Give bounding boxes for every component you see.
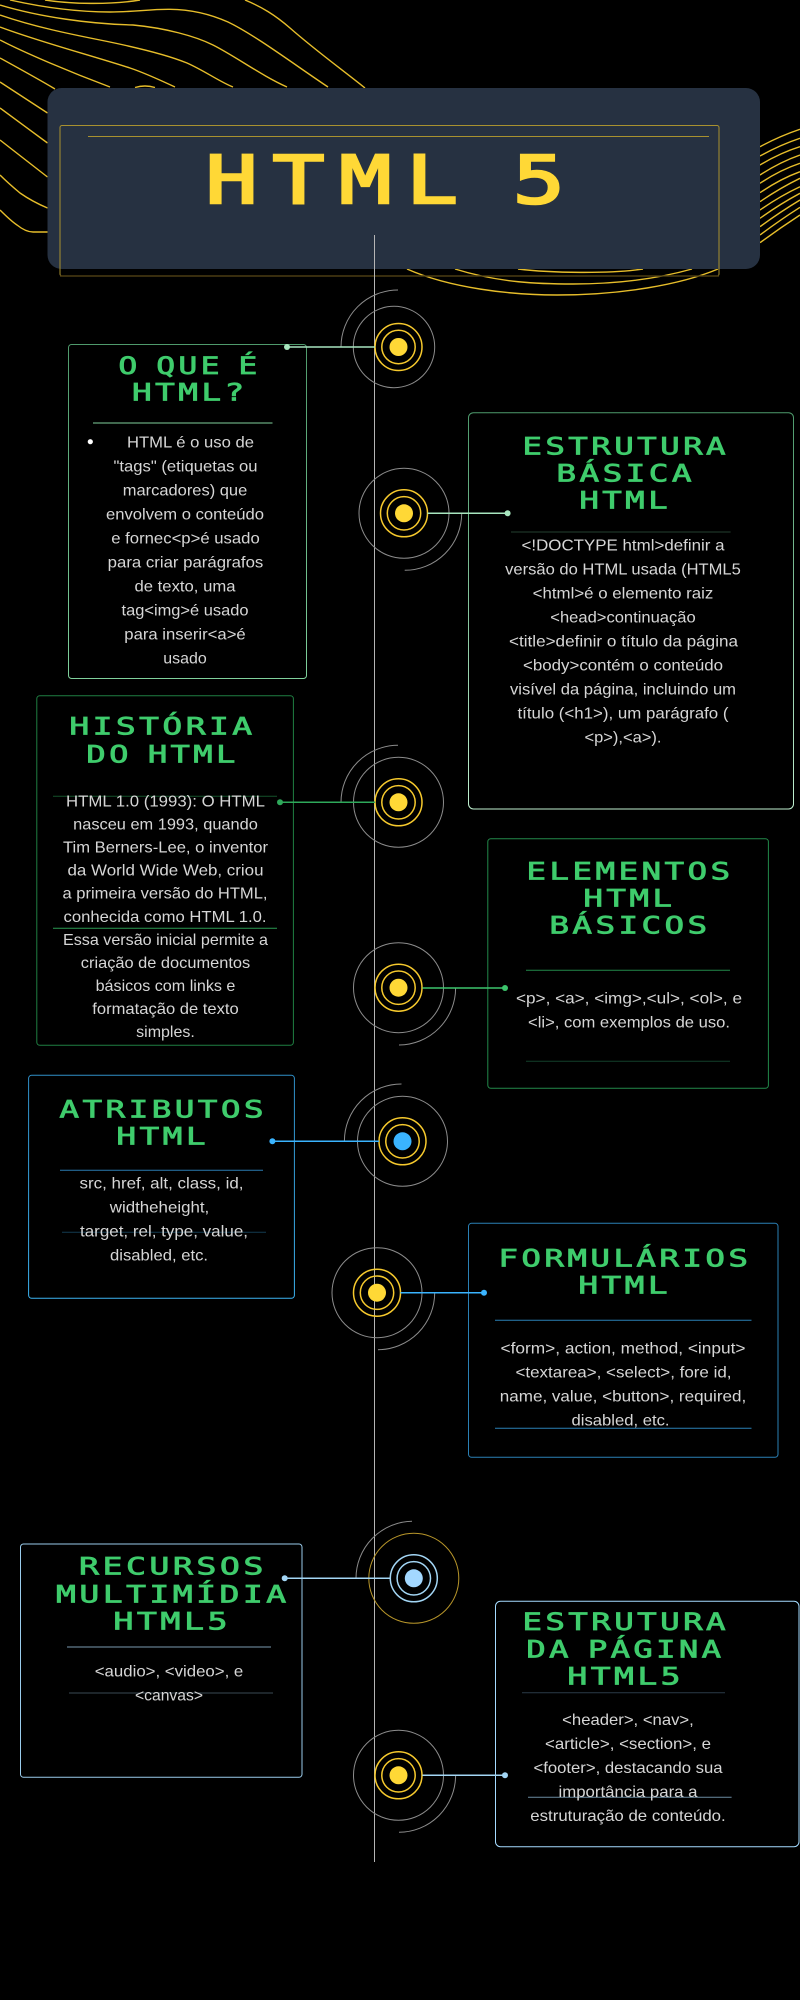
heading: o que é html: HTML? (132, 379, 248, 407)
body text: Tim Berners-Lee, o inventor (63, 840, 269, 857)
body text: disabled, etc. (110, 1247, 208, 1264)
body text: usado (163, 650, 207, 667)
heading: história do html: HISTÓRIA (69, 710, 256, 740)
body text: <li>, com exemplos de uso. (528, 1014, 730, 1031)
body text: Essa versão inicial permite a (63, 932, 268, 949)
heading: elementos html básicos: HTML (583, 884, 675, 912)
body text: HTML 1.0 (1993): O HTML (66, 794, 265, 810)
body text: src, href, alt, class, id, (80, 1175, 244, 1192)
body text: de texto, uma (134, 578, 236, 595)
body text: visível da página, incluindo um (510, 682, 736, 698)
heading: estrutura básica html: BÁSICA (556, 458, 695, 487)
body text (516, 990, 742, 1031)
heading: história do html (69, 710, 256, 768)
body text (80, 1175, 248, 1264)
body text: estruturação de conteúdo. (530, 1808, 726, 1825)
heading: formulários html (498, 1244, 751, 1300)
heading: estrutura da página html5: ESTRUTURA (522, 1608, 729, 1636)
body text: marcadores) que (123, 482, 247, 499)
body text: <form>, action, method, <input> (500, 1340, 746, 1357)
heading: elementos html básicos (526, 857, 734, 939)
timeline axis (374, 235, 376, 1862)
body text: <textarea>, <select>, fore id, (516, 1364, 732, 1381)
body text: simples. (136, 1024, 195, 1041)
connector 1 (284, 344, 375, 350)
heading: formulários html: HTML (578, 1272, 671, 1300)
heading: recursos multimídia html5: MULTIMÍDIA (56, 1579, 290, 1608)
body text: <p>, <a>, <img>,<ul>, <ol>, e (516, 990, 742, 1007)
body text: <audio>, <video>, e (95, 1664, 243, 1681)
body text: <title>definir o título da página (509, 634, 738, 650)
heading: atributos html: ATRIBUTOS (59, 1095, 267, 1123)
panel: estrutura da página html5 (496, 1601, 799, 1847)
panel: elementos html básicos (488, 839, 768, 1088)
heading: o que é html: O QUE É (118, 351, 261, 380)
heading: estrutura básica html: HTML (579, 487, 671, 515)
body text: importância para a (558, 1784, 698, 1801)
heading: estrutura básica html: ESTRUTURA (522, 433, 729, 461)
body text (500, 1340, 746, 1429)
body text (95, 1664, 243, 1705)
heading: recursos multimídia html5 (56, 1552, 290, 1635)
heading: estrutura da página html5: DA PÁGINA (526, 1634, 724, 1663)
body text: <footer>, destacando sua (534, 1760, 723, 1777)
heading: atributos html (59, 1095, 267, 1151)
body text: versão do HTML usada (HTML5 (505, 562, 741, 578)
body text (106, 434, 264, 667)
connector 8 (422, 1772, 508, 1778)
body text: para criar parágrafos (108, 554, 263, 571)
panel: história do html (37, 696, 293, 1045)
panel: formulários html (468, 1223, 778, 1457)
body text: para inserir<a>é (124, 626, 246, 643)
connector 6 (400, 1290, 487, 1296)
body text: target, rel, type, value, (80, 1223, 248, 1240)
body text: básicos com links e (96, 978, 236, 995)
body text: <body>contém o conteúdo (523, 658, 723, 674)
body text: <html>é o elemento raiz (533, 586, 713, 602)
heading: elementos html básicos: ELEMENTOS (526, 857, 734, 885)
body text: formatação de texto (92, 1001, 239, 1018)
background contour lines (0, 0, 800, 295)
body text: <header>, <nav>, (562, 1712, 694, 1729)
title: HTML 5 (206, 142, 580, 219)
body text: disabled, etc. (572, 1412, 670, 1429)
body text: name, value, <button>, required, (500, 1388, 746, 1405)
body text (530, 1712, 726, 1825)
body text: <canvas> (135, 1688, 203, 1705)
body text (505, 538, 741, 746)
heading: recursos multimídia html5: RECURSOS (79, 1552, 267, 1580)
body text: conhecida como HTML 1.0. (64, 909, 266, 926)
body text: nasceu em 1993, quando (73, 817, 258, 834)
title banner (48, 88, 760, 276)
heading: o que é html (118, 351, 261, 407)
heading: história do html: DO HTML (86, 740, 239, 768)
body text: e fornec<p>é usado (111, 530, 260, 547)
body text: envolvem o conteúdo (106, 506, 264, 523)
body text: <!DOCTYPE html>definir a (522, 538, 725, 554)
heading: estrutura básica html (522, 433, 729, 515)
panel: o que é html (68, 344, 306, 678)
heading: elementos html básicos: BÁSICOS (549, 910, 711, 939)
node 5 (344, 1084, 448, 1186)
bullet (88, 439, 93, 444)
body text: a primeira versão do HTML, (62, 886, 268, 903)
connector 7 (282, 1575, 390, 1581)
node 7 (356, 1521, 459, 1623)
node 8 (354, 1730, 456, 1832)
node 4 (354, 943, 456, 1045)
node 1 (341, 290, 435, 388)
panel: recursos multimídia html5 (20, 1544, 302, 1777)
node 6 (332, 1248, 435, 1350)
body text: widtheheight, (109, 1199, 209, 1216)
body text: <article>, <section>, e (545, 1736, 711, 1753)
connector 5 (269, 1138, 379, 1144)
body text: <head>continuação (550, 610, 696, 626)
node 2 (359, 468, 462, 570)
connector 4 (422, 985, 508, 991)
body text: "tags" (etiquetas ou (114, 458, 258, 475)
body text: título (<h1>), um parágrafo ( (518, 706, 729, 722)
heading: recursos multimídia html5: HTML5 (113, 1607, 231, 1635)
heading: estrutura da página html5: HTML5 (567, 1662, 684, 1690)
node 3 (341, 745, 444, 847)
body text: da World Wide Web, criou (68, 863, 264, 880)
body text: HTML é o uso de (127, 434, 254, 451)
panel: estrutura básica html (468, 413, 794, 809)
connector 3 (277, 799, 375, 805)
heading: atributos html: HTML (116, 1123, 209, 1151)
panel: atributos html (29, 1075, 294, 1298)
body text: tag<img>é usado (122, 602, 249, 619)
heading: estrutura da página html5 (522, 1608, 729, 1690)
body text: criação de documentos (81, 955, 250, 972)
body text: <p>),<a>). (584, 730, 662, 746)
body text (62, 794, 269, 1041)
connector 2 (428, 510, 511, 516)
heading: formulários html: FORMULÁRIOS (498, 1244, 751, 1273)
